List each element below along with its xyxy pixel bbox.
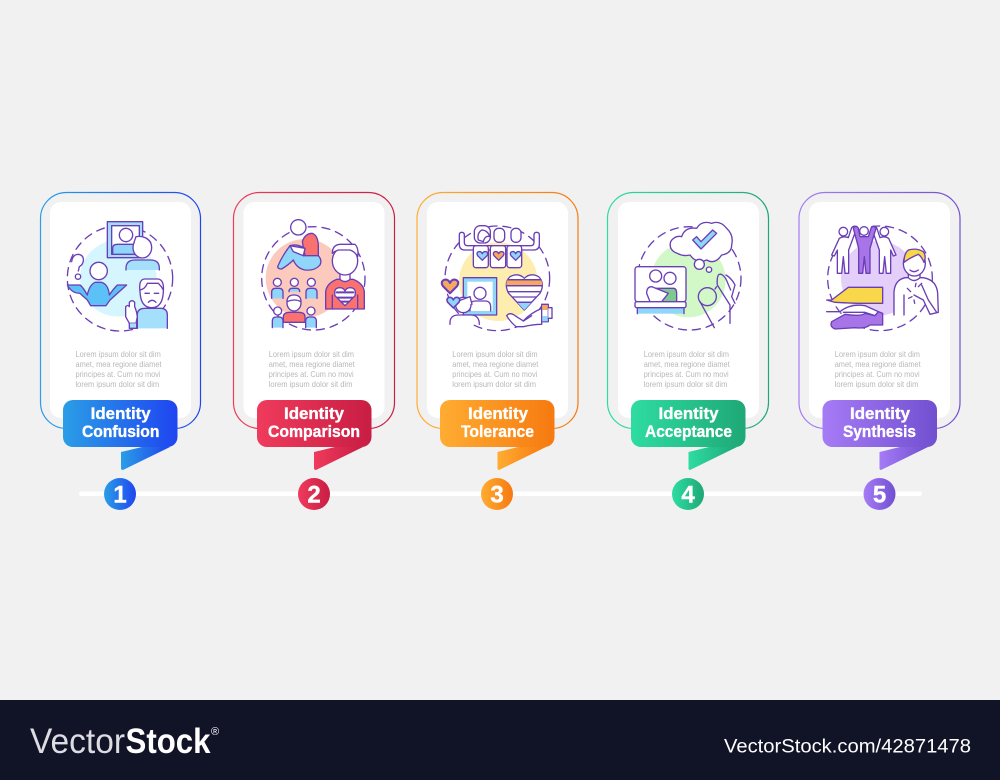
number badge: 4 [681, 482, 695, 508]
heading: Identity [850, 405, 911, 423]
heading: Identity [468, 405, 529, 423]
label box [440, 400, 554, 447]
panel: identity synthesis [799, 192, 960, 510]
text block: principes at. Cum no movi [644, 369, 729, 379]
heading: Acceptance [645, 423, 732, 441]
heading [268, 405, 360, 441]
number badge [104, 478, 136, 510]
panel: identity comparison [234, 192, 394, 510]
text block: lorem ipsum dolor sit dim [452, 379, 536, 389]
card outline [40, 192, 200, 428]
icon: thought cloud with check, couple at screen, OK hand [635, 222, 741, 330]
panel: identity confusion [40, 192, 200, 510]
heading: Synthesis [843, 423, 916, 441]
number badge: 1 [113, 482, 127, 508]
icon: three people, joined hands, happy man [827, 226, 938, 331]
text block: Lorem ipsum dolor sit dim [269, 349, 354, 359]
icon: group with hearts, portrait, striped heart on hand [442, 226, 552, 331]
icon: seated person, group, person with striped heart [262, 220, 365, 330]
heading: Identity [658, 405, 719, 423]
label box [631, 400, 746, 447]
card body [809, 202, 950, 418]
number badge [672, 478, 704, 510]
footer logo: Vector [30, 722, 125, 761]
text block: principes at. Cum no movi [452, 369, 537, 379]
label box [822, 400, 937, 447]
icon: confused person, mirror, refusing person [67, 222, 173, 331]
text block: amet, mea regione diamet [644, 359, 730, 369]
number badge: 5 [873, 482, 886, 508]
footer logo: ® [211, 726, 219, 738]
text block: amet, mea regione diamet [835, 359, 921, 369]
heading [645, 405, 732, 441]
card body [618, 202, 759, 418]
card body [50, 202, 191, 418]
label tail [314, 447, 363, 470]
text block: principes at. Cum no movi [835, 369, 920, 379]
heading: Identity [91, 405, 152, 423]
number badge: 2 [307, 482, 321, 508]
label tail [498, 447, 546, 470]
text block: Lorem ipsum dolor sit dim [76, 349, 161, 359]
footer image id: VectorStock.com/42871478 [724, 736, 971, 758]
number badge: 3 [490, 482, 504, 508]
card outline [417, 192, 578, 428]
card body [427, 202, 568, 418]
panel: identity acceptance [608, 192, 768, 510]
footer logo: Stock [126, 722, 211, 761]
label box [63, 400, 178, 447]
text block: lorem ipsum dolor sit dim [269, 379, 352, 389]
footer bar [0, 700, 1000, 780]
heading: Confusion [82, 423, 159, 441]
text block: lorem ipsum dolor sit dim [644, 379, 727, 389]
timeline line [79, 492, 922, 496]
label tail [880, 447, 928, 470]
text block: Lorem ipsum dolor sit dim [835, 349, 920, 359]
text block: Lorem ipsum dolor sit dim [452, 349, 538, 359]
text block [835, 349, 921, 389]
number badge [481, 478, 513, 510]
card outline [234, 192, 394, 428]
label tail [688, 447, 737, 470]
number badge [864, 478, 896, 510]
text block: lorem ipsum dolor sit dim [76, 379, 159, 389]
card outline [608, 192, 768, 428]
text block [269, 349, 355, 389]
number badge [298, 478, 330, 510]
text block [644, 349, 730, 389]
text block: principes at. Cum no movi [76, 369, 161, 379]
text block: principes at. Cum no movi [269, 369, 354, 379]
heading: Comparison [268, 423, 360, 441]
text block: Lorem ipsum dolor sit dim [644, 349, 729, 359]
text block: amet, mea regione diamet [269, 359, 355, 369]
label box [257, 400, 372, 447]
heading [461, 405, 534, 441]
heading: Tolerance [461, 423, 534, 441]
heading [843, 405, 916, 441]
label tail [121, 447, 170, 470]
heading [82, 405, 159, 441]
card body [244, 202, 384, 418]
text block: lorem ipsum dolor sit dim [835, 379, 918, 389]
heading: Identity [284, 405, 345, 423]
text block: amet, mea regione diamet [452, 359, 539, 369]
panel: identity tolerance [417, 192, 578, 510]
footer logo [30, 722, 219, 761]
text block: amet, mea regione diamet [76, 359, 162, 369]
card outline [799, 192, 960, 428]
text block [76, 349, 162, 389]
text block [452, 349, 539, 389]
